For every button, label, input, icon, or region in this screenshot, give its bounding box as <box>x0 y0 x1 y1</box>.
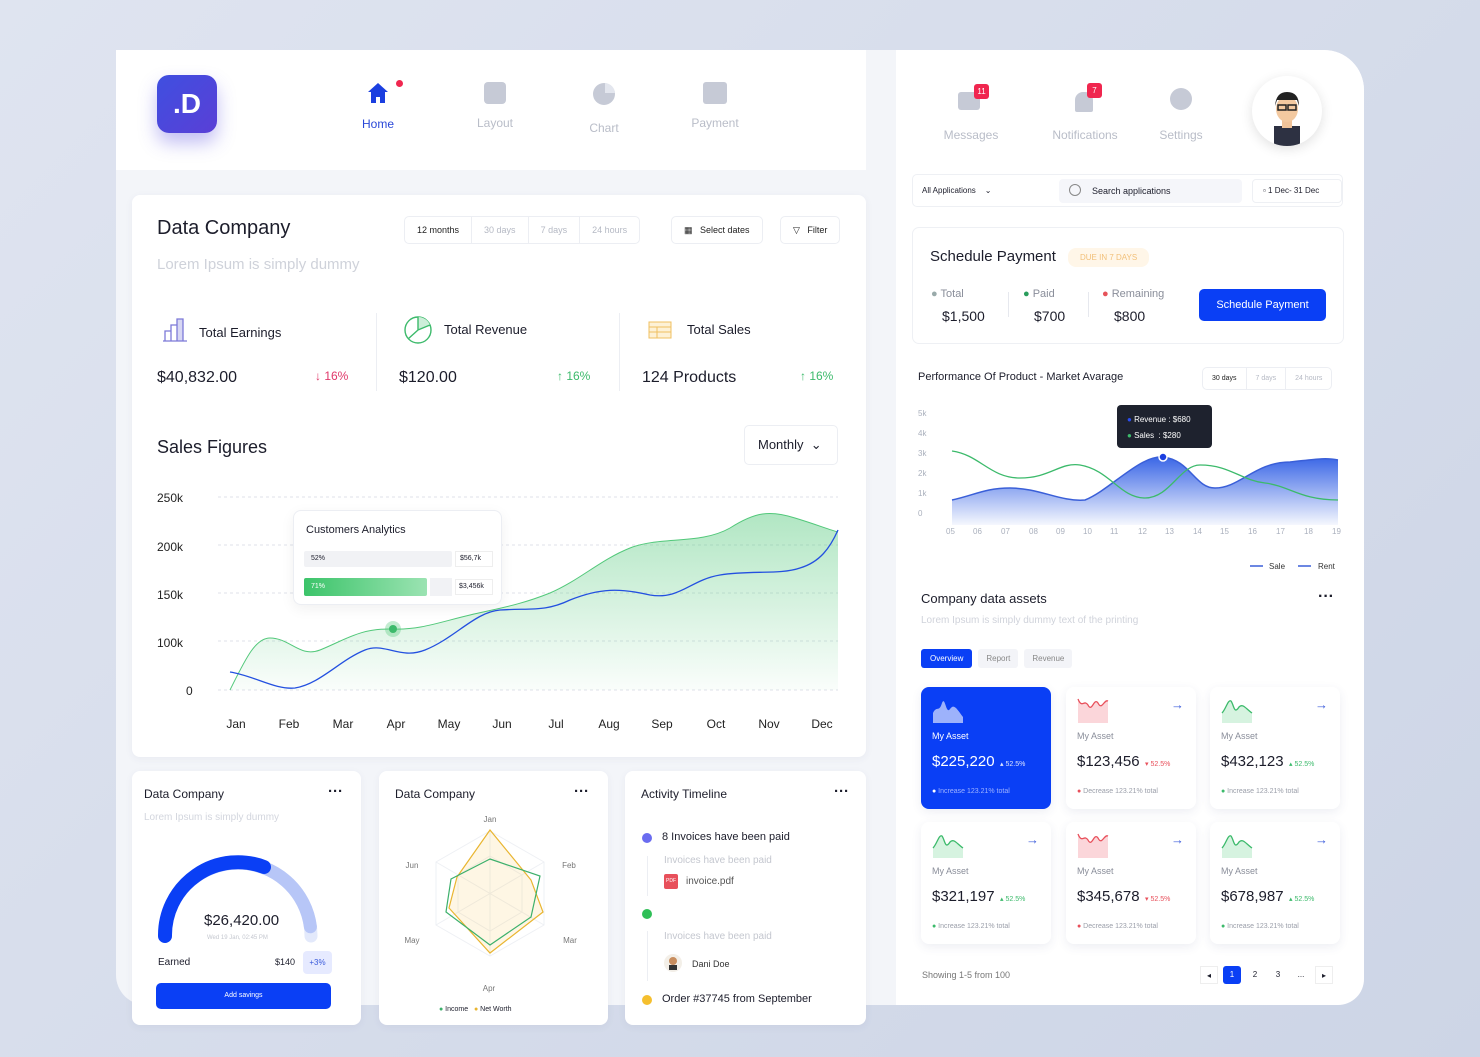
pdf icon: PDF <box>666 878 676 884</box>
performance chart: 07 <box>1001 527 1010 536</box>
card: activity timeline: ··· <box>834 783 849 800</box>
avatar small <box>664 954 682 972</box>
asset card 1 (blue): ● Increase 123.21% total <box>932 788 1010 795</box>
performance chart: 17 <box>1276 527 1285 536</box>
card: savings gauge: $26,420.00 <box>204 912 279 929</box>
schedule payment card: $1,500 <box>942 308 985 324</box>
asset card 1 (blue): ▴ 52.5% <box>1000 761 1025 768</box>
select dates button <box>671 216 763 244</box>
asset card 4: ● Increase 123.21% total <box>932 923 1010 930</box>
card: savings gauge: Earned <box>158 957 190 968</box>
sales figures chart: May <box>438 717 460 731</box>
add savings button: Add savings <box>224 992 263 999</box>
performance tabs: 24 hours <box>1295 375 1322 382</box>
card: savings gauge: Lorem Ipsum is simply dummy <box>144 812 279 823</box>
card: savings gauge: +3% <box>309 958 326 967</box>
asset card 2: $123,456 <box>1077 753 1140 770</box>
logo: .D <box>173 88 201 119</box>
top icons: settings <box>1159 88 1203 142</box>
schedule payment card: $800 <box>1114 308 1145 324</box>
pagination: 2 <box>1253 970 1257 979</box>
stat: total sales <box>642 322 833 386</box>
asset tabs <box>921 649 1072 668</box>
asset card 4: ▴ 52.5% <box>1000 896 1025 903</box>
sales figures heading: Sales Figures <box>157 437 267 457</box>
select dates button: ▦ Select dates <box>684 224 750 234</box>
sales figures chart: Oct <box>707 717 726 731</box>
asset card 6: $678,987 <box>1221 888 1284 905</box>
asset card 1 (blue) <box>921 687 1051 809</box>
asset card 5: $345,678 <box>1077 888 1140 905</box>
nav: home: Home <box>362 117 394 131</box>
asset card 6: ● Increase 123.21% total <box>1221 923 1299 930</box>
asset card 6: My Asset <box>1221 866 1258 876</box>
card: savings gauge: $140 <box>275 957 295 967</box>
filter bar: All Applications ⌄ <box>922 186 991 195</box>
asset card 3 <box>1210 687 1340 809</box>
tooltip: customers analytics <box>293 510 502 605</box>
sales figures chart: Feb <box>279 717 300 731</box>
sales figures chart: 100k <box>157 636 184 650</box>
sales figures chart: Jan <box>226 717 246 731</box>
schedule payment card: ● Total <box>931 288 964 300</box>
asset card 3: $432,123 <box>1221 753 1284 770</box>
card: activity timeline <box>625 771 866 1025</box>
card: radar chart: Jun <box>406 861 418 870</box>
monthly dropdown <box>744 425 838 465</box>
monthly dropdown: Monthly ⌄ <box>758 437 822 452</box>
tooltip: customers analytics: $56,7k <box>460 555 481 562</box>
main card: data company + sales figures <box>132 195 866 757</box>
company data assets heading: Company data assets <box>921 591 1047 606</box>
time range tabs: 7 days <box>541 225 567 235</box>
card: radar chart: ··· <box>574 783 589 800</box>
asset tabs: Report <box>986 654 1010 663</box>
avatar <box>1252 76 1322 146</box>
asset card 5: ● Decrease 123.21% total <box>1077 923 1158 930</box>
stat: total earnings: ↓ 16% <box>315 369 348 383</box>
performance tabs <box>1202 367 1332 390</box>
stat: total earnings: Total Earnings <box>199 325 281 340</box>
top icons: messages <box>944 84 998 142</box>
main card: data company + sales figures: Lorem Ipsum is simply dummy <box>157 256 360 273</box>
text: Lorem Ipsum is simply dummy text of the printing <box>921 615 1138 626</box>
performance chart: Sale <box>1269 562 1286 571</box>
logo <box>157 75 217 133</box>
stat: total revenue <box>399 316 590 386</box>
asset tabs: Revenue <box>1032 654 1064 663</box>
pdf icon <box>664 874 678 889</box>
card: radar chart: Apr <box>483 984 496 993</box>
tooltip: revenue: ● Revenue : $680 <box>1127 415 1191 424</box>
asset card 2: ● Decrease 123.21% total <box>1077 788 1158 795</box>
sales figures chart: 250k <box>157 491 184 505</box>
performance chart: 14 <box>1193 527 1202 536</box>
schedule payment card: $700 <box>1034 308 1065 324</box>
search: Search applications <box>1092 186 1171 196</box>
asset card 5: → <box>1171 832 1184 847</box>
card: activity timeline: Invoices have been paid <box>664 931 772 942</box>
asset card 3: → <box>1315 697 1328 712</box>
performance chart: 05 <box>946 527 955 536</box>
top icons: settings: Settings <box>1159 128 1203 142</box>
sales figures chart <box>157 491 839 731</box>
nav: home <box>362 80 403 131</box>
card: activity timeline: Activity Timeline <box>641 787 727 801</box>
filter button: ▽ Filter <box>793 224 827 234</box>
sales figures chart: Nov <box>758 717 780 731</box>
card: radar chart <box>379 771 608 1025</box>
asset card 6 <box>1210 822 1340 944</box>
tooltip: customers analytics: $3,456k <box>459 583 484 590</box>
card: activity timeline: 8 Invoices have been paid <box>662 831 790 843</box>
date range <box>1252 179 1342 203</box>
performance title: Performance Of Product - Market Avarage <box>918 371 1123 383</box>
asset card 4: $321,197 <box>932 888 995 905</box>
asset card 1 (blue): $225,220 <box>932 753 995 770</box>
card: activity timeline: Invoices have been paid <box>664 855 772 866</box>
stat: total revenue: Total Revenue <box>444 322 527 337</box>
asset card 5 <box>1066 822 1196 944</box>
performance chart: 5k <box>918 409 927 418</box>
performance chart: 19 <box>1332 527 1341 536</box>
text: ··· <box>1318 588 1334 605</box>
performance tabs: 7 days <box>1256 375 1276 382</box>
search <box>1059 179 1242 203</box>
nav: layout <box>477 82 513 130</box>
sales figures chart: 150k <box>157 588 184 602</box>
schedule payment card: ● Paid <box>1023 288 1055 300</box>
asset card 4: → <box>1026 832 1039 847</box>
asset tabs: Overview <box>930 654 963 663</box>
pagination: ◂ <box>1207 971 1211 980</box>
card: radar chart: Jan <box>484 815 496 824</box>
asset card 6: ▴ 52.5% <box>1289 896 1314 903</box>
card: radar chart: Data Company <box>395 787 475 801</box>
card: savings gauge: Wed 19 Jan, 02:45 PM <box>207 935 268 941</box>
asset card 3: My Asset <box>1221 731 1258 741</box>
asset card 2 <box>1066 687 1196 809</box>
asset card 4: My Asset <box>932 866 969 876</box>
performance chart: 0 <box>918 509 923 518</box>
sales figures chart: Jun <box>492 717 512 731</box>
stat: total revenue: $120.00 <box>399 369 457 386</box>
performance chart: 10 <box>1083 527 1092 536</box>
time range tabs: 24 hours <box>592 225 627 235</box>
asset card 2: My Asset <box>1077 731 1114 741</box>
card: radar chart: Feb <box>562 861 576 870</box>
performance chart: 13 <box>1165 527 1174 536</box>
asset card 2: → <box>1171 697 1184 712</box>
schedule payment card: Schedule Payment <box>930 248 1056 265</box>
asset card 1 (blue): My Asset <box>932 731 969 741</box>
nav: payment <box>691 82 739 130</box>
performance chart: 15 <box>1220 527 1229 536</box>
performance chart <box>918 409 1341 571</box>
asset card 5: My Asset <box>1077 866 1114 876</box>
schedule payment card: DUE IN 7 DAYS <box>1080 253 1137 262</box>
stat: total revenue: ↑ 16% <box>557 369 590 383</box>
schedule payment card <box>912 227 1344 344</box>
sales figures chart: 200k <box>157 540 184 554</box>
gauge <box>158 855 318 943</box>
radar legend: ● Income ● Net Worth <box>439 1006 512 1013</box>
tooltip: customers analytics: Customers Analytics <box>306 524 406 536</box>
tooltip: customers analytics: 71% <box>311 583 325 590</box>
card: radar chart: Mar <box>563 936 577 945</box>
stat: total sales: ↑ 16% <box>800 369 833 383</box>
asset card 6: → <box>1315 832 1328 847</box>
card: activity timeline: Order #37745 from September <box>662 993 812 1005</box>
performance chart: Rent <box>1318 562 1336 571</box>
top nav header <box>116 50 866 170</box>
tooltip: customers analytics: 52% <box>311 555 325 562</box>
dashboard container <box>116 50 1364 1005</box>
nav: layout: Layout <box>477 116 513 130</box>
pagination: Showing 1-5 from 100 <box>922 970 1010 980</box>
performance chart: 18 <box>1304 527 1313 536</box>
top icons: notifications: Notifications <box>1052 128 1118 142</box>
card: savings gauge: ··· <box>328 783 343 800</box>
card: activity timeline: Dani Doe <box>692 959 730 969</box>
schedule button: Schedule Payment <box>1216 299 1309 311</box>
time range tabs: 12 months <box>417 225 459 235</box>
asset card 2: ▾ 52.5% <box>1145 761 1170 768</box>
tooltip: revenue: ● Sales : $280 <box>1127 431 1181 440</box>
sales figures chart: Dec <box>811 717 833 731</box>
nav: payment: Payment <box>691 116 739 130</box>
performance chart: 1k <box>918 489 927 498</box>
time range tabs <box>404 216 640 244</box>
performance chart: 4k <box>918 429 927 438</box>
schedule payment card: ● Remaining <box>1102 288 1164 300</box>
sales figures chart: Mar <box>333 717 353 731</box>
performance chart: 16 <box>1248 527 1257 536</box>
pagination: 1 <box>1230 970 1234 979</box>
pagination: 3 <box>1276 970 1280 979</box>
right panel <box>896 50 1364 1005</box>
asset card 5: ▾ 52.5% <box>1145 896 1170 903</box>
performance chart: 3k <box>918 449 927 458</box>
nav: chart <box>589 83 619 135</box>
sales figures chart: 0 <box>186 684 193 698</box>
add savings button <box>156 983 331 1009</box>
top icons: messages: Messages <box>944 128 998 142</box>
performance chart: 08 <box>1029 527 1038 536</box>
sales figures chart: Aug <box>598 717 620 731</box>
performance chart: 06 <box>973 527 982 536</box>
performance chart: 09 <box>1056 527 1065 536</box>
sales figures chart: Sep <box>651 717 673 731</box>
top icons: messages: 11 <box>977 87 986 96</box>
stat: total earnings: $40,832.00 <box>157 369 237 386</box>
stat: total sales: 124 Products <box>642 369 736 386</box>
top icons: notifications <box>1052 83 1118 142</box>
asset card 3: ● Increase 123.21% total <box>1221 788 1299 795</box>
top icons: notifications: 7 <box>1092 86 1097 95</box>
card: savings gauge <box>132 771 361 1025</box>
pagination <box>922 966 1333 984</box>
performance chart: 12 <box>1138 527 1147 536</box>
card: savings gauge: Data Company <box>144 787 224 801</box>
asset card 4 <box>921 822 1051 944</box>
date range: ▫ 1 Dec- 31 Dec <box>1263 186 1319 195</box>
performance chart: 11 <box>1110 527 1119 536</box>
schedule button <box>1199 289 1326 321</box>
nav: chart: Chart <box>589 121 619 135</box>
performance chart: 2k <box>918 469 927 478</box>
performance tabs: 30 days <box>1212 375 1237 382</box>
sales figures chart: Jul <box>548 717 564 731</box>
main card: data company + sales figures: Data Company <box>157 217 290 239</box>
stat: total sales: Total Sales <box>687 322 751 337</box>
asset card 3: ▴ 52.5% <box>1289 761 1314 768</box>
filter bar <box>912 174 1343 207</box>
stat: total earnings <box>157 318 348 386</box>
card: activity timeline: invoice.pdf <box>686 876 734 887</box>
sales figures chart: Apr <box>387 717 405 731</box>
card: radar chart: May <box>404 936 420 945</box>
pagination: ▸ <box>1322 971 1326 980</box>
pagination: ... <box>1298 970 1304 979</box>
tooltip: revenue <box>1117 405 1212 448</box>
filter button <box>780 216 840 244</box>
time range tabs: 30 days <box>484 225 516 235</box>
